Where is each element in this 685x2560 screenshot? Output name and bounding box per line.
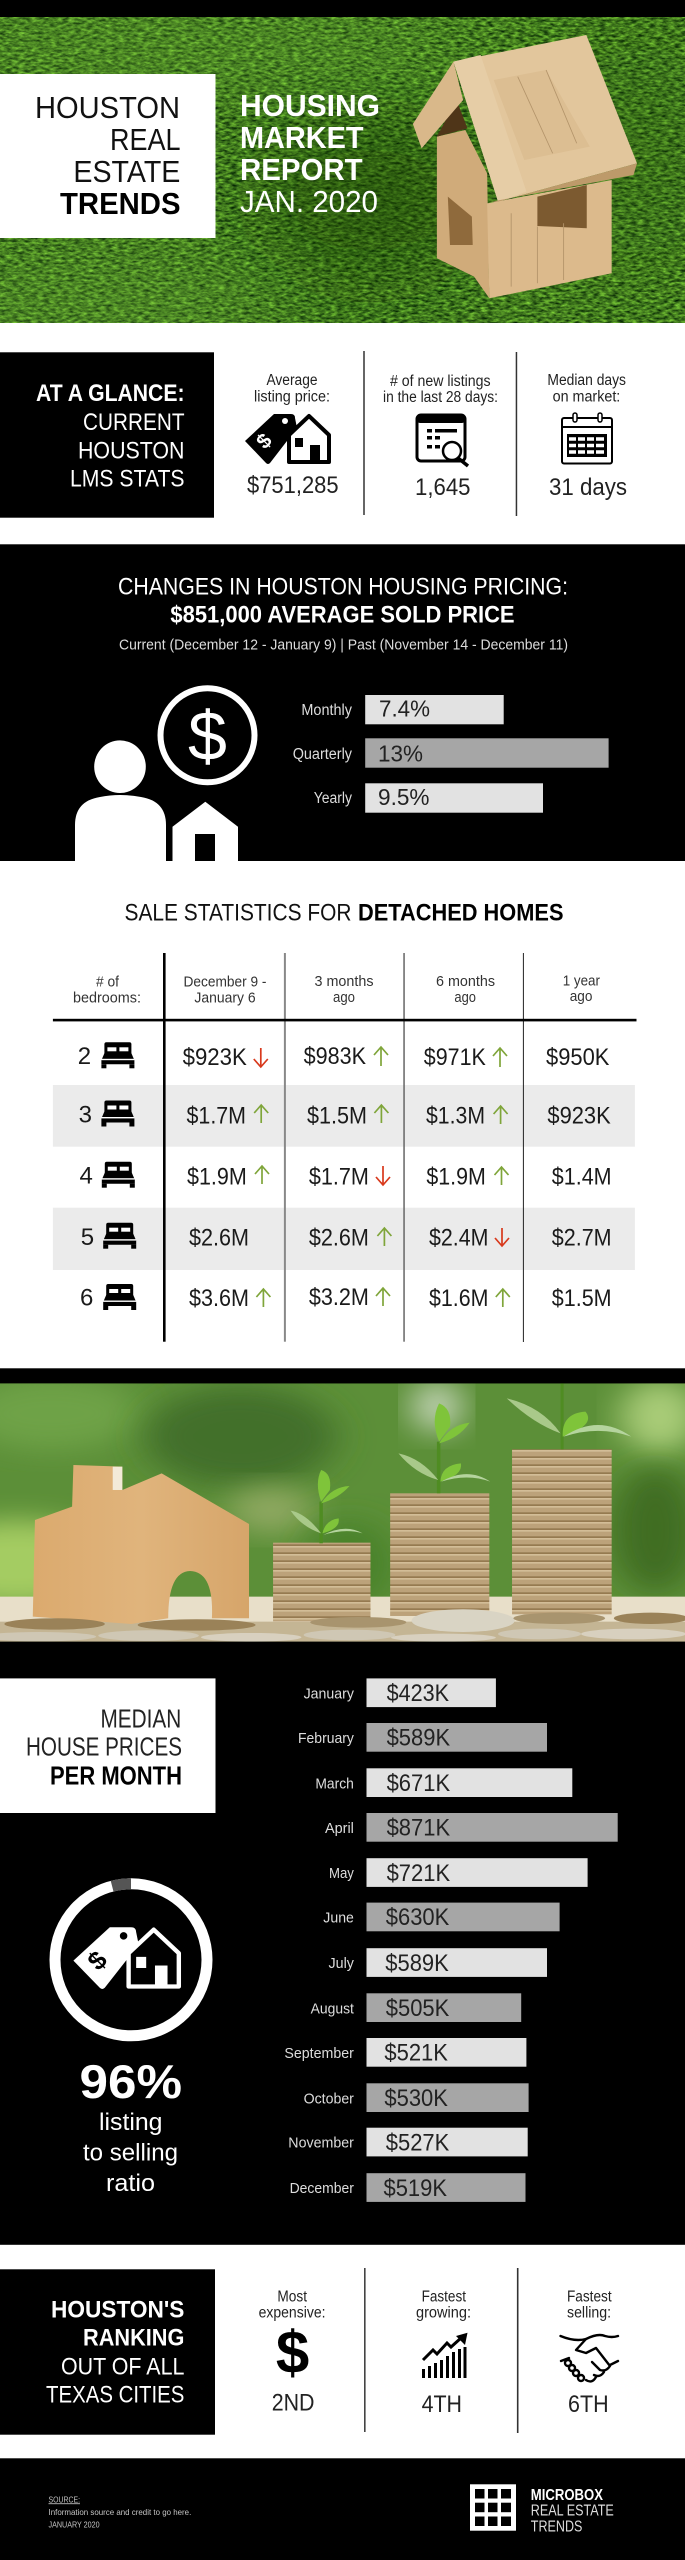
bar: February: $589K [387,1725,450,1752]
bar: August: $505K [386,1995,449,2022]
bar: September: $521K [384,2040,448,2067]
seedlings [291,1383,631,1543]
stat: new listings [383,373,498,501]
row: 4 bedrooms: $1.9M [187,1163,247,1190]
row: 3 bedrooms [79,1100,611,1129]
row: 6 bedrooms [80,1284,612,1312]
bar: yearly: 9.5% [378,784,430,810]
panel: median house prices per month heading: HOUSE PRICES [26,1732,182,1762]
ranking: fastest selling: 6TH [568,2391,609,2418]
table header: 1 year [563,973,600,990]
row: 4 bedrooms [80,1162,612,1190]
row: 5 bedrooms: $2.6M [189,1225,249,1252]
heading [118,573,568,653]
source credit: SOURCE: [48,2494,80,2504]
row: 2 bedrooms: $971K [424,1044,486,1071]
bar: monthly: Monthly [301,702,352,719]
ranking: most expensive [259,2289,326,2417]
bar: December: $519K [384,2175,447,2202]
row: 3 bedrooms: $1.5M [307,1102,367,1129]
black background: monthly prices section [0,1368,685,2245]
row: 3 bedrooms: 3 [79,1101,92,1128]
bar: yearly: Yearly [314,790,352,807]
title panel: Houston real estate trends: ESTATE [73,154,180,189]
icon: price tag and house [73,1927,179,1989]
ranking: most expensive: expensive: [259,2305,326,2322]
bar: July: July [328,1955,354,1972]
icon: rising chart [423,2333,468,2378]
row: 6 bedrooms: 6 [80,1285,93,1312]
icon: person, dollar bubble and house [75,688,254,861]
row: 2 bedrooms [78,1042,609,1071]
ratio label: to selling [83,2140,178,2167]
source credit: JANUARY 2020 [48,2519,100,2529]
bar: February: February [298,1730,354,1747]
bar: July [328,1948,547,1977]
bar: October: $530K [384,2085,448,2112]
bar: April: $871K [387,1815,450,1842]
panel: Houston's ranking: OUT OF ALL [61,2353,184,2380]
ranking: fastest selling [560,2289,618,2418]
bar: September [284,2038,526,2067]
row: 2 bedrooms: $950K [546,1044,609,1071]
table header: January 6 [194,990,256,1007]
bar: January: $423K [387,1680,449,1707]
heading: $851,000 AVERAGE SOLD PRICE [170,602,515,629]
table header: ago [454,989,476,1006]
ranking: fastest selling: Fastest [567,2289,612,2306]
title panel: Houston real estate trends [0,74,216,238]
ratio label: 96% [80,2055,182,2108]
bar: quarterly: Quarterly [293,746,352,763]
panel: at a glance [0,352,214,518]
bar: November: November [288,2135,354,2152]
bar: January [304,1678,496,1707]
row: 5 bedrooms: 5 [81,1224,94,1251]
panel: at a glance: AT A GLANCE: [36,380,184,407]
bar: February [298,1723,547,1752]
bar: May: $721K [387,1860,450,1887]
ranking: fastest growing: 4TH [422,2391,462,2418]
table header [73,973,600,1007]
ranking: fastest growing: growing: [416,2305,471,2322]
panel: median house prices per month heading: MEDIAN [100,1704,181,1734]
icon: dollar sign: $ [276,2319,309,2386]
row: 3 bedrooms: $923K [547,1102,611,1129]
ratio label [80,2055,182,2197]
panel: Houston's ranking [0,2269,215,2435]
panel: Houston's ranking: RANKING [83,2325,184,2352]
bar: March [315,1768,572,1797]
stat: average listing price: $751,285 [247,472,339,499]
table header: # of [96,974,120,991]
icon: handshake [560,2335,618,2381]
source credit: Information source and credit to go here. [48,2507,191,2517]
report heading: JAN. 2020 [240,184,378,219]
ranking: fastest selling: selling: [567,2305,611,2322]
row: 2 bedrooms: $923K [183,1044,247,1071]
heading: Current (December 12 - January 9) | Past (November 14 - December 11) [119,636,568,653]
source credit [48,2494,191,2529]
bar: yearly [314,783,543,813]
bar: December: December [290,2180,354,2197]
bar: November: $527K [386,2129,449,2156]
table header: ago [570,988,592,1005]
panel: median house prices per month heading [0,1678,216,1813]
row: 3 bedrooms: $1.7M [186,1102,246,1129]
bar: November [288,2128,528,2156]
row: 4 bedrooms: 4 [80,1162,93,1189]
bar: quarterly [293,738,609,768]
panel: footer [0,2458,685,2560]
row: 5 bedrooms [81,1223,612,1252]
bar: March: $671K [387,1770,450,1797]
logo wordmark: REAL ESTATE [531,2503,614,2520]
bar: quarterly: 13% [378,741,423,767]
bar: monthly [301,695,504,724]
ranking: fastest growing [416,2289,471,2418]
bar: August: August [311,2000,355,2017]
icon: listing with magnifier [417,414,468,466]
bar: September: September [284,2045,354,2062]
panel: at a glance: HOUSTON [78,437,184,464]
logo wordmark: TRENDS [531,2519,582,2536]
bar chart: median prices per month [284,1678,618,2202]
panel: at a glance: LMS STATS [70,466,184,493]
bar: June: $630K [386,1904,449,1931]
row: 6 bedrooms: $1.6M [429,1285,488,1312]
table: detached home sale statistics [53,953,636,1342]
row: 2 bedrooms: 2 [78,1043,91,1070]
heading: sale statistics: SALE STATISTICS FOR [124,900,352,927]
stat: median days on market: 31 days [549,474,627,501]
title panel: Houston real estate trends: TRENDS [60,186,180,221]
logo wordmark: MICROBOX [531,2487,603,2504]
table header: 3 months [314,973,374,990]
foreground coins [0,1609,685,1642]
stat: median days on market: Median days [547,372,626,389]
bar: January: January [304,1685,354,1702]
bar: October: October [304,2090,354,2107]
row: 4 bedrooms: $1.7M [309,1163,369,1190]
panel: Houston's ranking: HOUSTON'S [51,2296,184,2323]
row: 4 bedrooms: $1.9M [426,1163,486,1190]
stat: median days on market: on market: [553,388,620,406]
panel: changes in Houston housing pricing [0,544,685,861]
row: 6 bedrooms: $1.5M [552,1285,612,1312]
table header: 6 months [436,973,495,990]
table header: December 9 - [184,974,266,991]
bar: June: June [323,1910,354,1927]
icon: price tag and house: $ [81,1944,113,1976]
stat: average listing price: Average [266,372,318,389]
table header: ago [333,989,355,1006]
bar: August [311,1993,521,2022]
icon: person, dollar bubble and house: $ [188,697,227,775]
stat: new listings: # of new listings [390,373,491,390]
logo wordmark [531,2487,614,2536]
row: 2 bedrooms: $983K [304,1043,366,1070]
stat: median days on market [547,372,627,501]
panel: Houston's ranking: TEXAS CITIES [46,2382,184,2409]
hero photo: wooden house on grass [0,15,685,340]
bar: May [329,1858,588,1887]
wooden house [33,1465,249,1624]
ratio label: listing [99,2109,162,2136]
bar: October [304,2083,529,2112]
stat: new listings: 1,645 [415,474,470,501]
bar: December [290,2173,526,2202]
report heading: REPORT [240,152,363,187]
title panel: Houston real estate trends: REAL [110,122,180,157]
ranking: most expensive: Most [277,2289,308,2306]
row: 6 bedrooms: $3.2M [309,1284,369,1311]
row: 6 bedrooms: $3.6M [189,1285,249,1312]
report heading: HOUSING [240,88,380,123]
report heading: MARKET [240,120,364,155]
stat: average listing price: listing price: [254,388,330,406]
bar: monthly: 7.4% [379,696,430,722]
stat: new listings: in the last 28 days: [383,389,498,406]
logo icon [470,2484,516,2531]
row: 3 bedrooms: $1.3M [426,1102,485,1129]
bar: May: May [329,1865,354,1882]
table header: bedrooms: [73,990,141,1007]
panel: median house prices per month heading: PER MONTH [50,1760,182,1790]
row: 5 bedrooms: $2.4M [429,1225,488,1252]
ranking: most expensive: 2ND [272,2390,314,2417]
heading: CHANGES IN HOUSTON HOUSING PRICING: [118,573,568,600]
donut chart: 96% listing to selling ratio [55,1884,207,2197]
row: 4 bedrooms: $1.4M [552,1163,612,1190]
bar: March: March [315,1775,354,1792]
heading: detached homes: DETACHED HOMES [358,900,564,927]
photo: wooden house and coin stacks with seedlings [0,1377,685,1642]
ratio label: ratio [106,2170,155,2197]
icon: price tag and house: $ [252,429,277,454]
report heading [240,88,380,219]
icon: calendar [562,413,612,464]
bar: June [323,1903,560,1931]
panel: at a glance: CURRENT [83,409,185,436]
bar: April [325,1813,618,1842]
top black band [0,0,685,17]
title panel: Houston real estate trends: HOUSTON [35,90,180,125]
row: 5 bedrooms: $2.7M [552,1225,612,1252]
ranking: fastest growing: Fastest [422,2289,467,2306]
stat: average listing price [245,372,339,499]
coin stacks [273,1543,370,1621]
bar: April: April [325,1820,354,1837]
bar: July: $589K [385,1950,449,1977]
row: 5 bedrooms: $2.6M [309,1225,369,1252]
